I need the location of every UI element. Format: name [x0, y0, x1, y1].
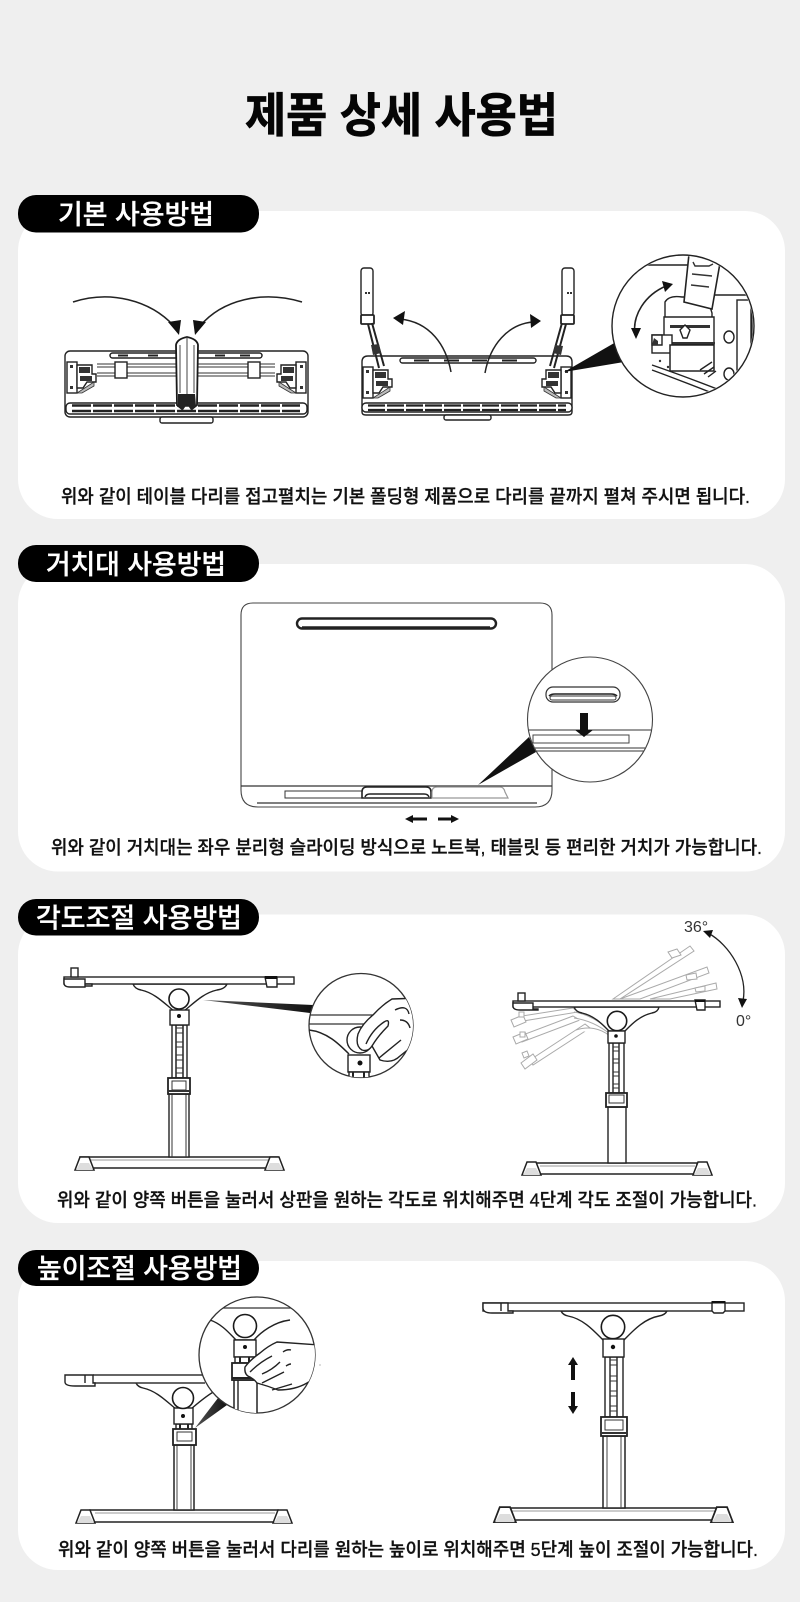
- title: 제품 상세 사용법: [245, 89, 558, 142]
- arrow: rotate: [631, 281, 673, 339]
- heading: holder use: [18, 545, 259, 582]
- diagram: table side view: [64, 968, 420, 1170]
- caption: height adjustment: 위와 같이 양쪽 버튼을 눌러서 다리를 원하는 높이로 위치해주면 5단계 높이 조절이 가능합니다.: [58, 1539, 758, 1560]
- callout wedge: [478, 737, 536, 785]
- caption: basic use: 위와 같이 테이블 다리를 접고펼치는 기본 폴딩형 제품으로 다리를 끝까지 펼쳐 주시면 됩니다.: [61, 486, 750, 507]
- diagram: height with detail: [65, 1297, 321, 1523]
- label: 0 degrees: 0°: [736, 1013, 751, 1030]
- arrow: up: [568, 1357, 578, 1380]
- heading: holder use: 거치대 사용방법: [46, 550, 226, 580]
- arrow: slide right: [438, 815, 459, 823]
- arrow: slide left: [405, 815, 427, 823]
- arrow: down: [568, 1392, 578, 1414]
- bottom centre slider: [362, 787, 431, 798]
- panel: basic use: [18, 195, 785, 519]
- callout wedge: [203, 1000, 313, 1013]
- heading: angle adjustment: 각도조절 사용방법: [36, 904, 242, 934]
- arrow: fold in left: [73, 297, 181, 335]
- arrow: leg out right: [485, 314, 541, 373]
- heading: basic use: [18, 195, 259, 232]
- bottom right slider: [432, 787, 508, 798]
- panel: holder use: [18, 545, 785, 872]
- callout: button press circle: [305, 974, 420, 1078]
- caption: holder use: 위와 같이 거치대는 좌우 분리형 슬라이딩 방식으로 노트북, 태블릿 등 편리한 거치가 가능합니다.: [51, 837, 762, 858]
- label: 36 degrees: 36°: [684, 919, 708, 936]
- bottom left slot: [285, 791, 362, 798]
- heading: height adjustment: 높이조절 사용방법: [37, 1254, 242, 1284]
- panel: height adjustment: [18, 1250, 785, 1570]
- diagram: folded table: [65, 297, 308, 423]
- leg left: [361, 268, 384, 368]
- stray dot: [319, 1364, 321, 1366]
- callout wedge: [195, 1398, 227, 1428]
- callout: hinge detail circle: [612, 254, 754, 406]
- ghost top positions: [511, 946, 717, 1069]
- diagram: legs unfolded: [361, 254, 754, 420]
- callout: slot detail circle: [525, 657, 655, 782]
- callout wedge: [564, 342, 624, 372]
- arrow: tilt arc: [703, 930, 747, 1008]
- heading: basic use: 기본 사용방법: [58, 200, 214, 230]
- arrow: insert down: [575, 713, 593, 737]
- diagram: tilt range: [511, 919, 751, 1175]
- callout: height button circle: [195, 1297, 320, 1420]
- diagram: tabletop: [241, 603, 655, 823]
- caption: angle adjustment: 위와 같이 양쪽 버튼을 눌러서 상판을 원하는 각도로 위치해주면 4단계 각도 조절이 가능합니다.: [57, 1190, 757, 1210]
- top slot: [297, 618, 496, 628]
- leg right: [550, 268, 574, 368]
- arrow: fold in right: [193, 297, 302, 335]
- arrow: leg out left: [393, 311, 451, 372]
- panel: angle adjustment: [18, 899, 785, 1223]
- diagram: height range: [483, 1301, 744, 1522]
